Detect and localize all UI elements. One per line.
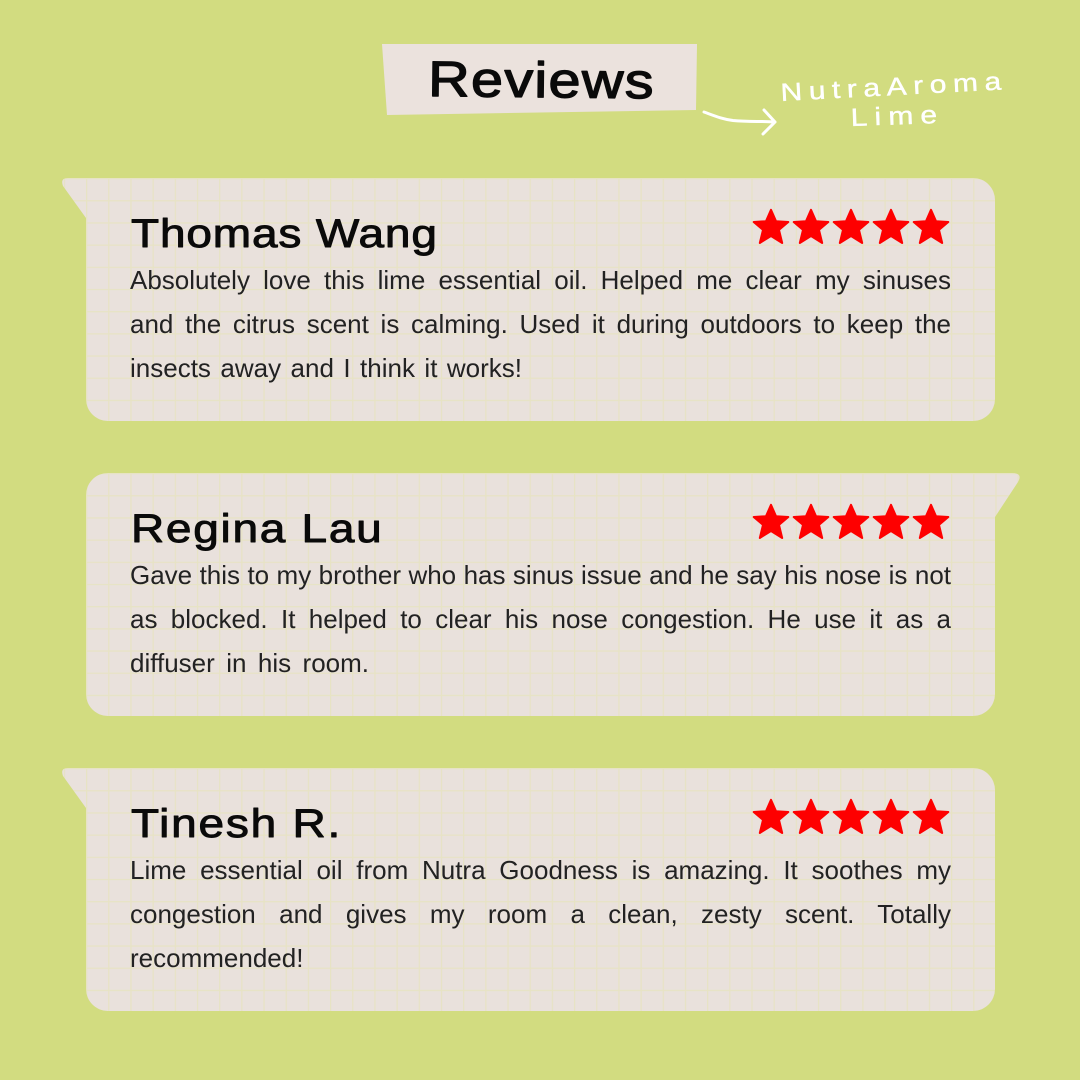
five star rating [754, 210, 948, 243]
review text: Regina Lau: Gave this to my brother who has sinus issue and he say his nose is not [130, 560, 951, 590]
panel: Thomas Wang review [62, 178, 995, 421]
product name note [780, 67, 1002, 131]
panel: Regina Lau review [86, 473, 1020, 716]
product name note: NutraAroma [780, 67, 1002, 106]
five star rating [754, 800, 948, 833]
reviewer name: Regina Lau [131, 507, 382, 551]
review text: Tinesh R.: congestion and gives my room a clean, zesty scent. Totally [130, 899, 951, 929]
reviewer name: Thomas Wang [131, 212, 437, 256]
arrow to product name [704, 110, 775, 134]
title: Reviews: Reviews [428, 51, 654, 109]
review text: Thomas Wang: insects away and I think it works! [130, 353, 522, 383]
five star rating [754, 505, 948, 538]
panel: Tinesh R. review [62, 768, 995, 1011]
review text: Thomas Wang: Absolutely love this lime essential oil. Helped me clear my sinuses [130, 265, 951, 295]
review text: Regina Lau: as blocked. It helped to clear his nose congestion. He use it as a [130, 604, 951, 634]
product name note: Lime [850, 100, 938, 131]
review text: Tinesh R.: Lime essential oil from Nutra Goodness is amazing. It soothes my [130, 855, 951, 885]
review text: Regina Lau [130, 560, 951, 678]
review text: Regina Lau: diffuser in his room. [130, 648, 369, 678]
review text: Thomas Wang: and the citrus scent is calming. Used it during outdoors to keep the [130, 309, 951, 339]
review text: Thomas Wang [130, 265, 951, 383]
review text: Tinesh R.: recommended! [130, 943, 303, 973]
reviewer name: Tinesh R. [131, 802, 340, 846]
review text: Tinesh R. [130, 855, 951, 973]
title banner [382, 44, 697, 115]
